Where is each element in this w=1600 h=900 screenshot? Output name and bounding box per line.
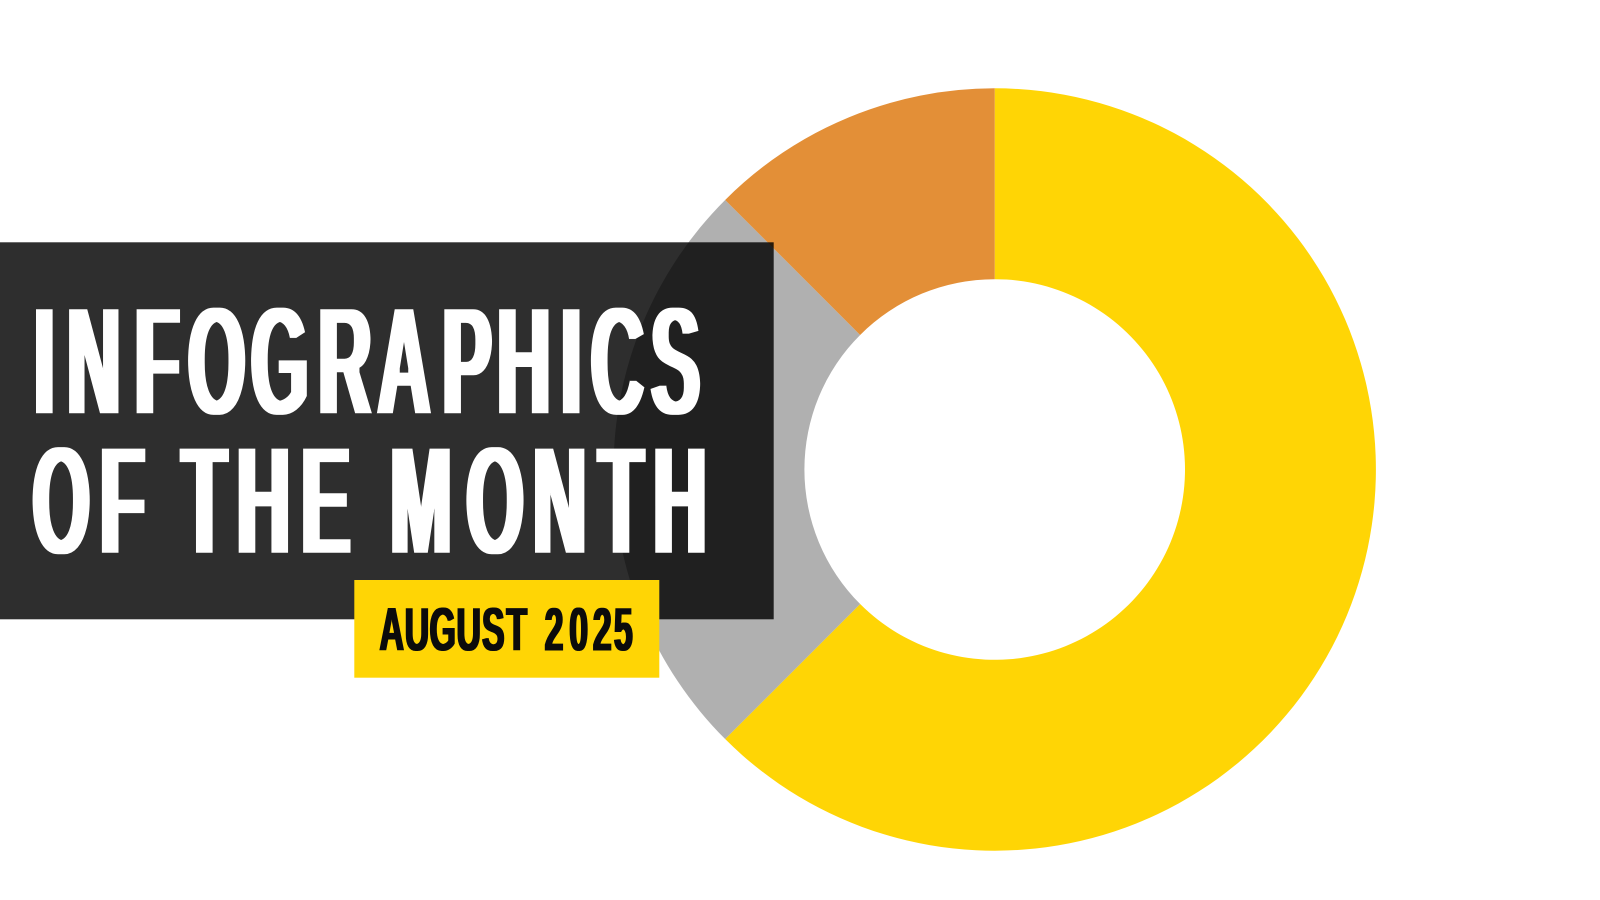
title line 1: INFOGRAPHICS (34, 273, 700, 449)
title line 2: OF THE MONTH (32, 413, 707, 588)
slice: yellow (725, 88, 1376, 851)
title (32, 273, 707, 588)
donut chart (613, 88, 1376, 851)
slice: orange (725, 88, 995, 335)
date badge (354, 580, 659, 678)
date text: AUGUST 2025 (379, 595, 633, 664)
title banner (0, 242, 774, 619)
slice: grey (613, 200, 860, 739)
